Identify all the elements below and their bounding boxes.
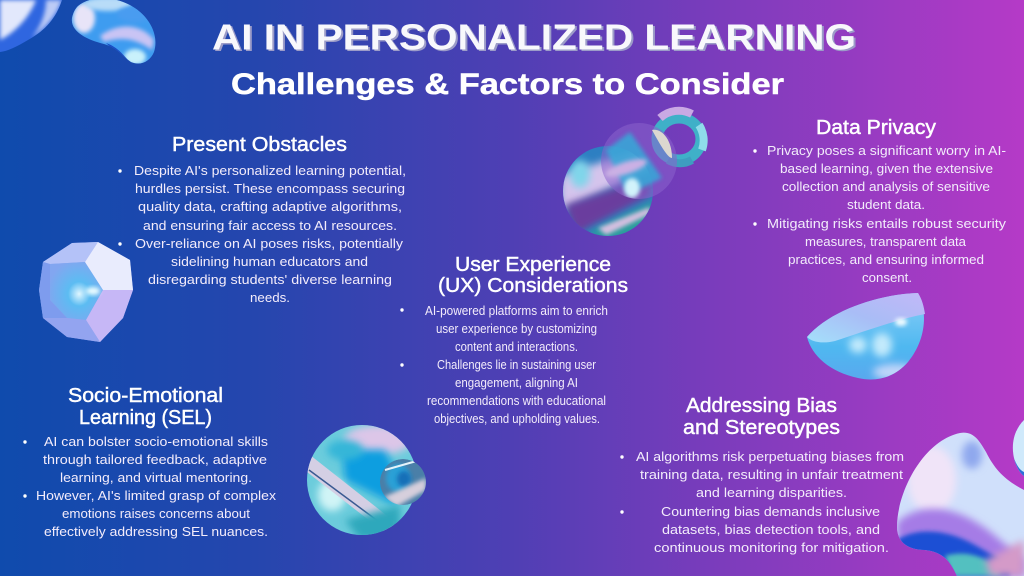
panel: socio-emotional learning (23, 385, 277, 539)
ring (657, 111, 704, 163)
text block: data privacy bullets: Mitigating risks entails robust security (767, 217, 1007, 231)
text block: addressing bias bullets: and learning disparities. (696, 486, 847, 500)
text block: data privacy bullets (753, 144, 1007, 285)
text block: present obstacles bullets: Over-reliance on AI poses risks, potentially (135, 237, 404, 251)
heading: user experience: (UX) Considerations (438, 275, 628, 297)
text block: present obstacles bullets: sidelining human educators and (171, 255, 368, 269)
text block: socio-emotional learning bullets: through tailored feedback, adaptive (43, 453, 267, 467)
text block: user experience bullets: Challenges lie in sustaining user (437, 358, 596, 372)
heading: user experience: User Experience (455, 254, 611, 276)
text block: socio-emotional learning bullets: AI can bolster socio-emotional skills (44, 435, 268, 449)
text block: user experience bullets: objectives, and upholding values. (434, 412, 600, 426)
panel: data privacy (753, 117, 1007, 285)
heading: socio-emotional learning: Socio-Emotional (68, 385, 223, 407)
panel: user experience (400, 254, 628, 426)
decorative shape: bottom-right liquid blob (890, 415, 1024, 576)
text block: present obstacles bullets: quality data, crafting adaptive algorithms, (138, 200, 402, 214)
text block: present obstacles bullets: needs. (250, 291, 290, 305)
text block: data privacy bullets: student data. (847, 198, 925, 212)
glass disc (601, 123, 677, 199)
text block: present obstacles bullets: hurdles persist. These encompass securing (135, 182, 405, 196)
text block: addressing bias bullets: datasets, bias detection tools, and (662, 523, 880, 537)
icon: striped sphere (305, 422, 426, 540)
heading: data privacy: Data Privacy (816, 117, 936, 139)
subtitle: Challenges & Factors to Consider (231, 68, 784, 101)
heading: socio-emotional learning (68, 385, 223, 429)
hemisphere rim (807, 293, 925, 342)
text block: socio-emotional learning bullets: However, AI's limited grasp of complex (36, 489, 277, 503)
text block: present obstacles bullets: Despite AI's personalized learning potential, (134, 164, 406, 178)
text block: user experience bullets (400, 304, 608, 426)
text block: data privacy bullets: practices, and ensuring informed (788, 253, 984, 267)
text block: addressing bias bullets: training data, resulting in unfair treatment (640, 468, 904, 482)
decorative shape: top liquid blob (72, 0, 156, 64)
text block: user experience bullets: AI-powered platforms aim to enrich (425, 304, 608, 318)
text block: data privacy bullets: Privacy poses a significant worry in AI- (767, 144, 1006, 158)
icon: faceted gem (39, 242, 133, 342)
text block: socio-emotional learning bullets (23, 435, 277, 539)
text block: user experience bullets: user experience by customizing (436, 322, 597, 336)
heading: addressing bias: Addressing Bias (686, 395, 837, 417)
heading: socio-emotional learning: Learning (SEL) (79, 407, 212, 429)
text block: socio-emotional learning bullets: learning, and virtual mentoring. (60, 471, 252, 485)
text block: present obstacles bullets (118, 164, 406, 305)
text block: addressing bias bullets (620, 450, 904, 555)
text block: data privacy bullets: measures, transparent data (805, 235, 966, 249)
text block: user experience bullets: recommendations with educational (427, 394, 606, 408)
text block: addressing bias bullets: AI algorithms risk perpetuating biases from (636, 450, 904, 464)
text block: present obstacles bullets: and ensuring fair access to AI resources. (143, 219, 397, 233)
large sphere (563, 146, 653, 236)
icon: glass hemisphere (807, 293, 925, 380)
text block: addressing bias bullets: continuous monitoring for mitigation. (654, 541, 889, 555)
text block: user experience bullets: engagement, aligning AI (455, 376, 578, 390)
text block: addressing bias bullets: Countering bias demands inclusive (661, 505, 880, 519)
panel: addressing bias (620, 395, 904, 555)
panel: present obstacles (118, 134, 406, 305)
icon: glass spheres and ring (560, 111, 704, 240)
heading: user experience (438, 254, 628, 297)
text block: data privacy bullets: based learning, given the extensive (780, 162, 993, 176)
text block: data privacy bullets: consent. (862, 271, 912, 285)
text block: socio-emotional learning bullets: emotions raises concerns about (62, 507, 251, 521)
text block: socio-emotional learning bullets: effectively addressing SEL nuances. (44, 525, 268, 539)
text block: data privacy bullets: collection and analysis of sensitive (782, 180, 990, 194)
title: AI IN PERSONALIZED LEARNING (212, 16, 856, 58)
text block: present obstacles bullets: disregarding students' diverse learning (148, 273, 392, 287)
heading: present obstacles: Present Obstacles (172, 134, 347, 156)
heading: addressing bias: and Stereotypes (683, 417, 840, 439)
decorative shape: top-left liquid blob (0, 0, 62, 52)
title: AI IN PERSONALIZED LEARNING (214, 18, 858, 59)
text block: user experience bullets: content and interactions. (455, 340, 578, 354)
heading: addressing bias (683, 395, 840, 439)
